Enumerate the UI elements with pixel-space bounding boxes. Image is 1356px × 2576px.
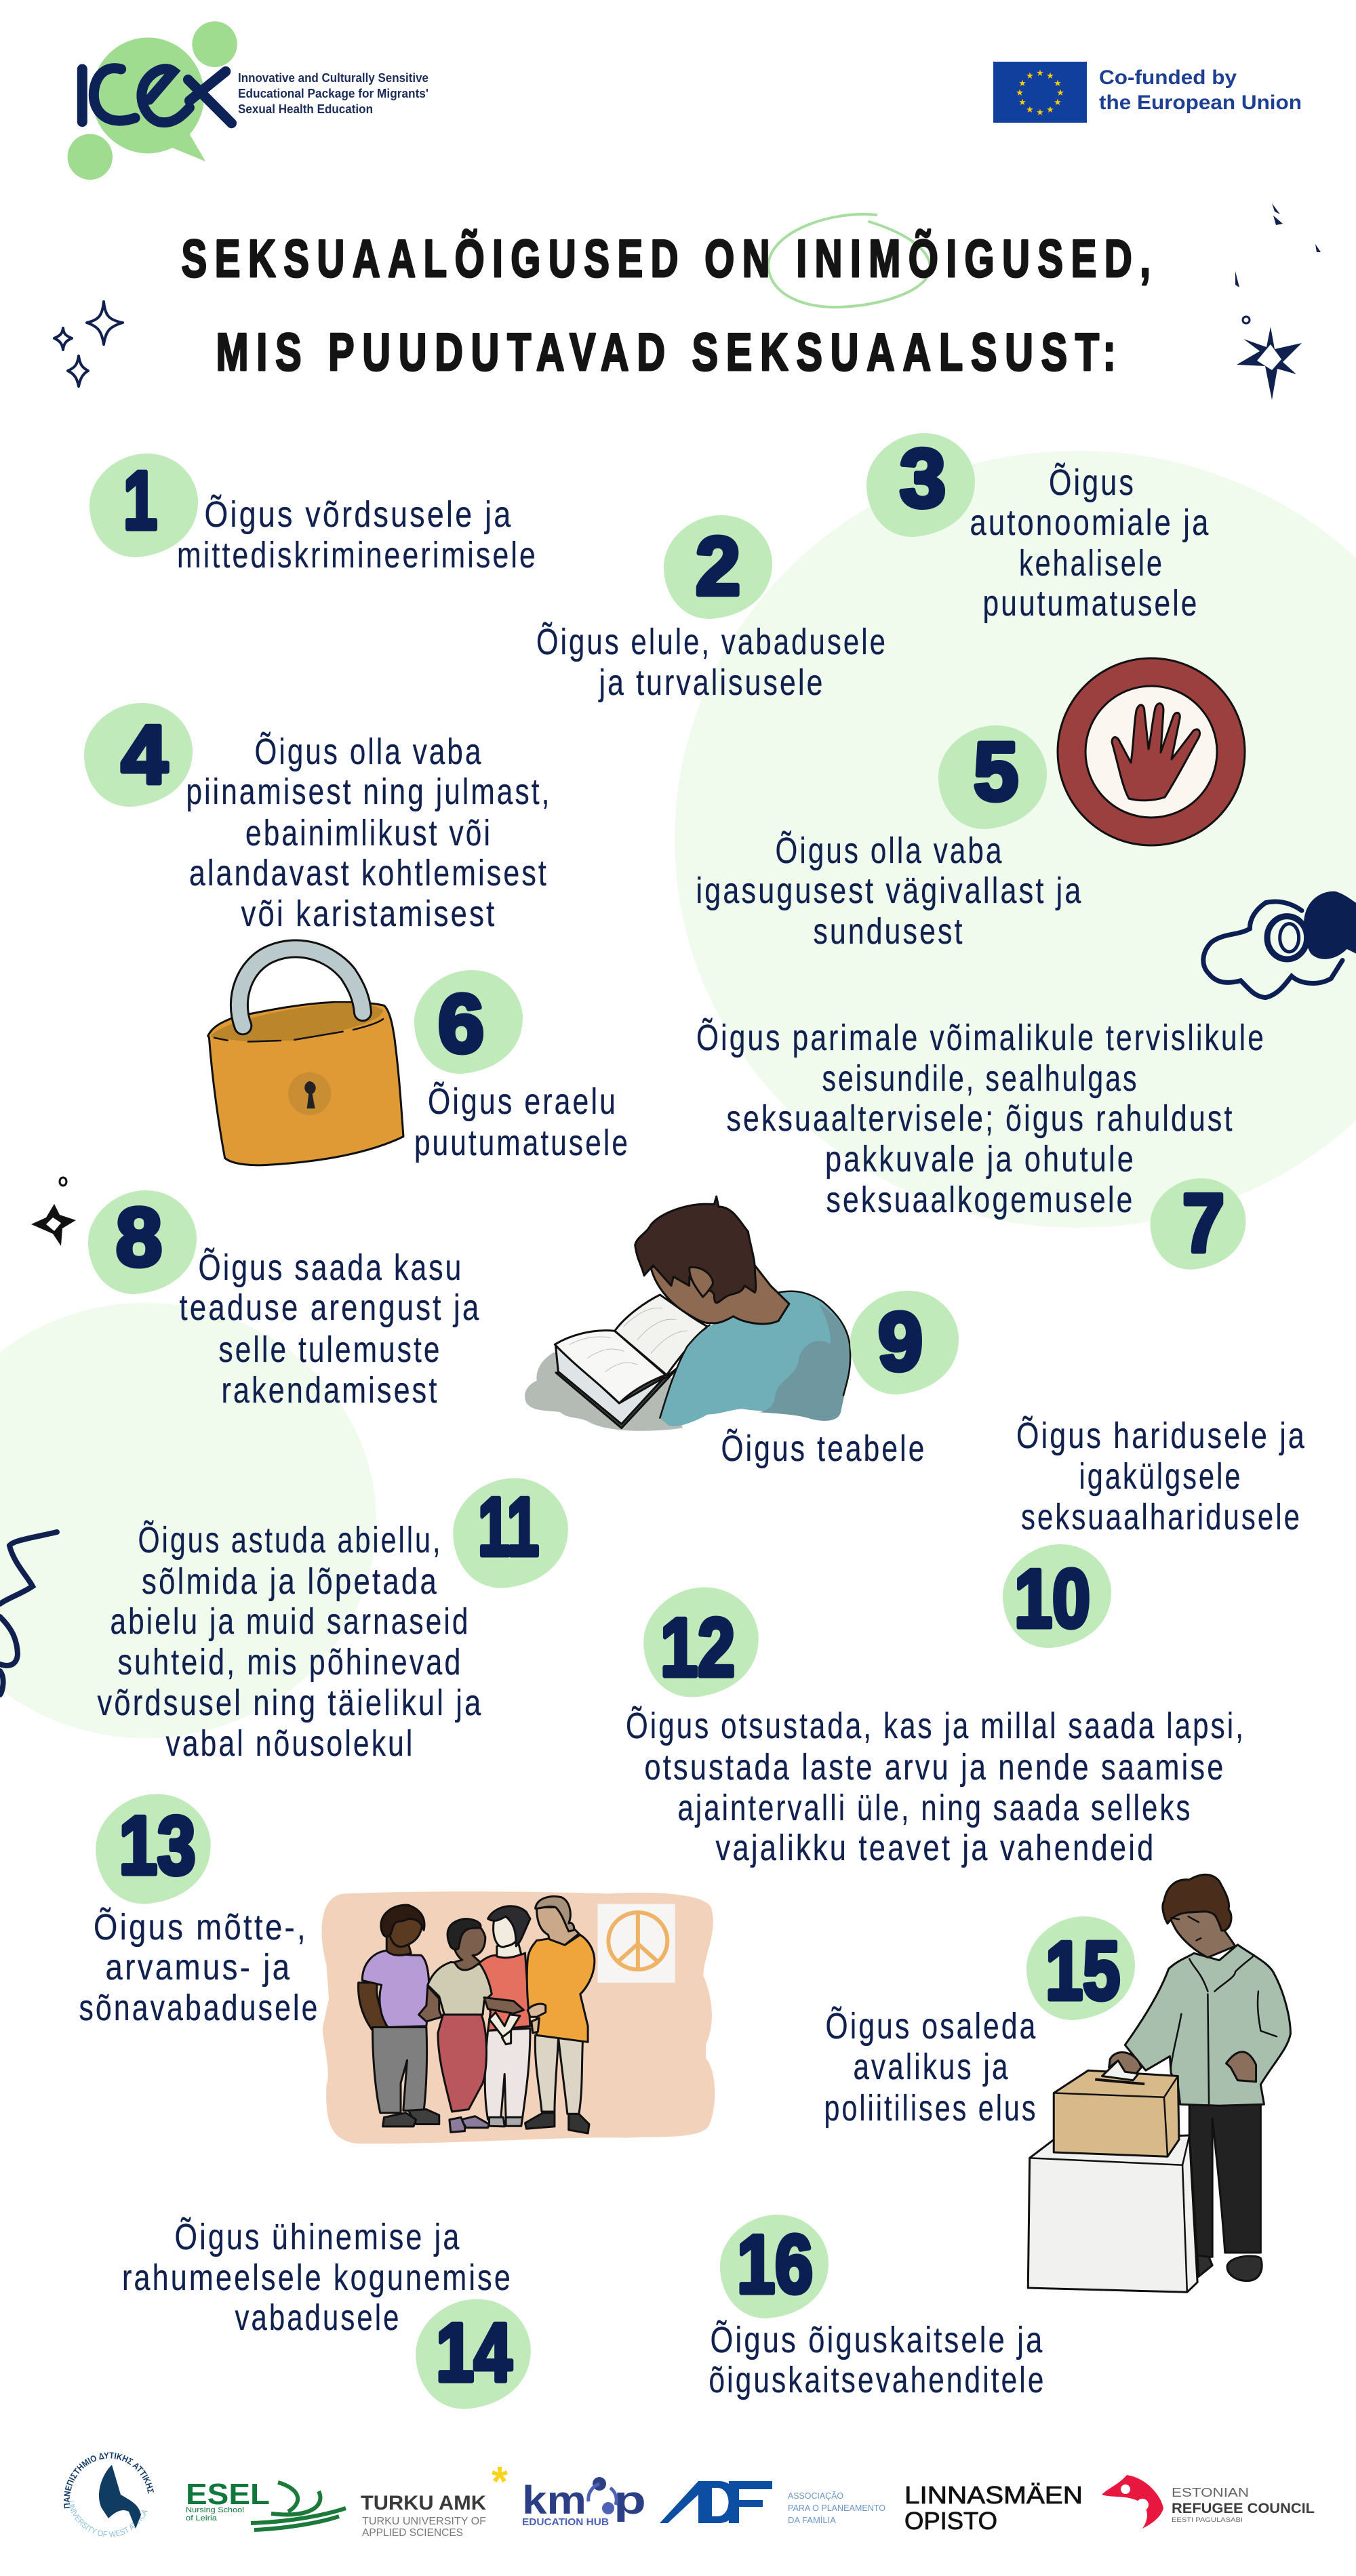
right 15 text: avalikus ja bbox=[853, 2047, 1010, 2087]
right 8 text: rakendamisest bbox=[221, 1370, 439, 1411]
right 4 text: või karistamisest bbox=[241, 893, 496, 934]
badge 8 bbox=[88, 1190, 197, 1294]
right 11 text: võrdsusel ning täielikul ja bbox=[98, 1683, 483, 1723]
right 16 text: õiguskaitsevahenditele bbox=[709, 2360, 1045, 2400]
icon: padlock bbox=[208, 948, 403, 1165]
highlight circle around INIM bbox=[768, 214, 930, 307]
logo: APF: DA FAMÍLIA bbox=[788, 2515, 836, 2525]
badge 8: 8 bbox=[116, 1191, 162, 1283]
right 9 text: Õigus teabele bbox=[721, 1428, 926, 1469]
badge 13 bbox=[96, 1794, 211, 1904]
badge 15: 15 bbox=[1045, 1925, 1120, 2017]
badge 3: 3 bbox=[900, 432, 946, 524]
logo: EU co-funded: ★ bbox=[1054, 78, 1062, 88]
logo: EU co-funded: ★ bbox=[1046, 104, 1054, 115]
right 2 text: ja turvalisusele bbox=[598, 662, 824, 703]
logo: ICEX: Educational Package for Migrants' bbox=[238, 87, 428, 100]
right 10 text: igakülgsele bbox=[1079, 1456, 1242, 1497]
logo: EU co-funded: ★ bbox=[1036, 68, 1044, 78]
right 8 text bbox=[179, 1247, 481, 1411]
badge 4 bbox=[84, 703, 193, 807]
logo: ICEX: Sexual Health Education bbox=[238, 102, 373, 116]
badge 9 bbox=[850, 1291, 959, 1394]
badge 1: 1 bbox=[123, 454, 157, 546]
logo: Linnasmäen Opisto bbox=[904, 2481, 1083, 2535]
logo: EU co-funded: the European Union bbox=[1099, 92, 1302, 114]
logo: APF bbox=[660, 2481, 885, 2525]
right 12 text: otsustada laste arvu ja nende saamise bbox=[644, 1747, 1226, 1788]
logo: ESEL bbox=[186, 2478, 346, 2530]
background circle: left bbox=[0, 1303, 376, 1738]
right 12 text: vajalikku teavet ja vahendeid bbox=[716, 1828, 1155, 1868]
right 5 text bbox=[696, 830, 1083, 952]
right 6 text: Õigus eraelu bbox=[428, 1081, 618, 1122]
right 8 text: selle tulemuste bbox=[218, 1329, 442, 1370]
right 11 text: Õigus astuda abiellu, bbox=[138, 1520, 442, 1561]
badge 6: 6 bbox=[438, 978, 484, 1070]
badge 3 bbox=[866, 432, 975, 537]
right 10 text bbox=[1016, 1415, 1307, 1537]
right 5 text: sundusest bbox=[814, 911, 964, 952]
right 13 text: arvamus- ja bbox=[106, 1947, 292, 1988]
logo: EU co-funded: ★ bbox=[1056, 87, 1064, 98]
logo: Estonian Refugee Council: REFUGEE COUNCIL bbox=[1172, 2501, 1315, 2516]
right 1 text: mittediskrimineerimisele bbox=[177, 535, 538, 576]
badge 14: 14 bbox=[436, 2306, 512, 2398]
badge 7 bbox=[1151, 1177, 1245, 1270]
logo: EU co-funded: ★ bbox=[1018, 97, 1026, 107]
badge 5 bbox=[938, 725, 1047, 829]
star: left bbox=[31, 1178, 76, 1246]
logo: KMOP: km bbox=[522, 2478, 586, 2522]
logo: KMOP: p bbox=[614, 2478, 646, 2522]
badge 10: 10 bbox=[1014, 1552, 1090, 1645]
logo: EU co-funded: ★ bbox=[1026, 104, 1034, 115]
right 15 text: poliitilises elus bbox=[824, 2088, 1037, 2129]
right 7 text: seisundile, sealhulgas bbox=[822, 1058, 1139, 1099]
right 16 text bbox=[709, 2320, 1045, 2400]
logo: ESEL: of Leiria bbox=[186, 2514, 218, 2522]
right 3 text: puutumatusele bbox=[983, 583, 1199, 624]
badge 2: 2 bbox=[696, 520, 740, 612]
logo: University of West Attica: ΠΑΝΕΠΙΣΤΗΜΙΟ ΔΥΤΙΚΗΣ ΑΤΤΙΚΗΣ bbox=[64, 2453, 154, 2508]
logo: Linnasmäen Opisto: OPISTO bbox=[904, 2507, 997, 2535]
right 4 text bbox=[186, 731, 552, 934]
badge 12: 12 bbox=[660, 1601, 735, 1693]
badge 9: 9 bbox=[878, 1295, 923, 1388]
right 11 text bbox=[98, 1520, 483, 1764]
logo: EU co-funded: Co-funded by bbox=[1099, 66, 1237, 89]
right 4 text: ebainimlikust või bbox=[245, 813, 492, 853]
badge 4: 4 bbox=[121, 708, 167, 801]
right 14 text bbox=[122, 2217, 513, 2338]
badge 12 bbox=[643, 1587, 759, 1697]
logo: Estonian Refugee Council: EESTI PAGULASABI bbox=[1172, 2516, 1243, 2523]
right 3 text bbox=[970, 462, 1211, 624]
right 12 text bbox=[626, 1706, 1245, 1868]
logo: Turku AMK: TURKU UNIVERSITY OF bbox=[362, 2516, 486, 2527]
right 14 text: Õigus ühinemise ja bbox=[175, 2217, 461, 2257]
logo: EU co-funded: ★ bbox=[1018, 78, 1026, 88]
right 2 text: Õigus elule, vabadusele bbox=[536, 622, 888, 662]
illustration: group with peace poster bbox=[322, 1891, 715, 2144]
illustration: person reading bbox=[525, 1196, 850, 1431]
person 4 bbox=[525, 1897, 595, 2133]
right 6 text: puutumatusele bbox=[414, 1123, 630, 1163]
badge 11: 11 bbox=[478, 1481, 539, 1573]
right 3 text: Õigus bbox=[1049, 462, 1136, 503]
logo: EU co-funded: ★ bbox=[1036, 107, 1044, 117]
logo: University of West Attica bbox=[64, 2453, 154, 2537]
right 11 text: vabal nõusolekul bbox=[165, 1723, 415, 1764]
right 1 text bbox=[177, 494, 538, 576]
background circle: right bbox=[675, 451, 1356, 1228]
right 4 text: alandavast kohtlemisest bbox=[189, 853, 549, 893]
logo: APF: PARA O PLANEAMENTO bbox=[788, 2503, 885, 2513]
logo: ESEL: ESEL bbox=[186, 2478, 270, 2511]
right 3 text: kehalisele bbox=[1019, 543, 1164, 584]
badge 11 bbox=[453, 1478, 568, 1588]
logo: EU co-funded: ★ bbox=[1026, 71, 1034, 81]
logo: Linnasmäen Opisto: LINNASMÄEN bbox=[904, 2481, 1083, 2509]
right 12 text: ajaintervalli üle, ning saada selleks bbox=[678, 1788, 1192, 1828]
right 11 text: abielu ja muid sarnaseid bbox=[110, 1601, 471, 1642]
logo: Turku AMK bbox=[361, 2459, 509, 2539]
person 1 bbox=[358, 1905, 439, 2127]
right 8 text: teaduse arengust ja bbox=[179, 1287, 481, 1328]
right 15 text bbox=[824, 2006, 1037, 2129]
right 2 text bbox=[536, 622, 888, 703]
badge 6 bbox=[414, 970, 523, 1074]
right 7 text bbox=[696, 1018, 1266, 1220]
right 4 text: piinamisest ning julmast, bbox=[186, 771, 552, 812]
badge 5: 5 bbox=[974, 725, 1018, 818]
logo: Turku AMK: * bbox=[492, 2459, 509, 2505]
logo: APF: ASSOCIAÇÃO bbox=[788, 2491, 843, 2501]
logo: ICEX bbox=[68, 21, 428, 180]
right 6 text bbox=[414, 1081, 630, 1163]
logo: Turku AMK: APPLIED SCIENCES bbox=[362, 2527, 463, 2539]
badge 1 bbox=[89, 454, 198, 557]
right 13 text bbox=[79, 1907, 320, 2028]
badge 2 bbox=[664, 515, 772, 619]
right 7 text: seksuaalkogemusele bbox=[826, 1180, 1135, 1220]
logo: EU co-funded bbox=[993, 62, 1302, 123]
logo: EU co-funded: ★ bbox=[1016, 87, 1024, 98]
person 2 bbox=[418, 1919, 524, 2132]
badge 13: 13 bbox=[119, 1799, 195, 1891]
squiggle: left edge bbox=[0, 1532, 57, 1695]
illustration: voter bbox=[1028, 1874, 1290, 2292]
logo: EU co-funded: ★ bbox=[1054, 97, 1062, 107]
badge 14 bbox=[416, 2299, 531, 2409]
right 11 text: sõlmida ja lõpetada bbox=[142, 1561, 439, 1602]
right 5 text: igasugusest vägivallast ja bbox=[696, 870, 1083, 911]
logo: ICEX: Innovative and Culturally Sensitive bbox=[238, 71, 428, 85]
logo: KMOP bbox=[522, 2477, 646, 2528]
right 13 text: Õigus mõtte-, bbox=[94, 1907, 308, 1948]
right 7 text: pakkuvale ja ohutule bbox=[825, 1139, 1136, 1180]
icon: stop hand bbox=[1058, 658, 1245, 845]
logo: KMOP: EDUCATION HUB bbox=[522, 2516, 609, 2528]
star: top right bbox=[1235, 203, 1321, 400]
right 15 text: Õigus osaleda bbox=[826, 2006, 1037, 2047]
badge 16: 16 bbox=[737, 2218, 813, 2310]
right 16 text: Õigus õiguskaitsele ja bbox=[711, 2320, 1044, 2360]
right 14 text: rahumeelsele kogunemise bbox=[122, 2257, 513, 2298]
right 13 text: sõnavabadusele bbox=[79, 1988, 320, 2028]
right 4 text: Õigus olla vaba bbox=[255, 731, 483, 772]
logo: Estonian Refugee Council: ESTONIAN bbox=[1172, 2486, 1249, 2499]
person 3 bbox=[479, 1906, 530, 2127]
logo: Estonian Refugee Council bbox=[1102, 2475, 1315, 2529]
title bbox=[182, 228, 1158, 382]
right 14 text: vabadusele bbox=[235, 2297, 401, 2338]
right 3 text: autonoomiale ja bbox=[970, 502, 1211, 543]
scribble cloud bbox=[1203, 891, 1356, 998]
logo: University of West Attica: UNIVERSITY OF WEST ATTICA bbox=[68, 2500, 148, 2537]
sparkles: top left bbox=[54, 302, 123, 386]
badge 7: 7 bbox=[1182, 1177, 1224, 1269]
right 11 text: suhteid, mis põhinevad bbox=[118, 1642, 462, 1683]
right 5 text: Õigus olla vaba bbox=[776, 830, 1003, 871]
logo: ESEL: Nursing School bbox=[186, 2506, 244, 2514]
right 1 text: Õigus võrdsusele ja bbox=[205, 494, 513, 535]
right 8 text: Õigus saada kasu bbox=[198, 1247, 464, 1288]
right 7 text: seksuaaltervisele; õigus rahuldust bbox=[727, 1098, 1234, 1139]
logo: Turku AMK: TURKU AMK bbox=[361, 2492, 486, 2514]
logo: EU co-funded: ★ bbox=[1046, 71, 1054, 81]
